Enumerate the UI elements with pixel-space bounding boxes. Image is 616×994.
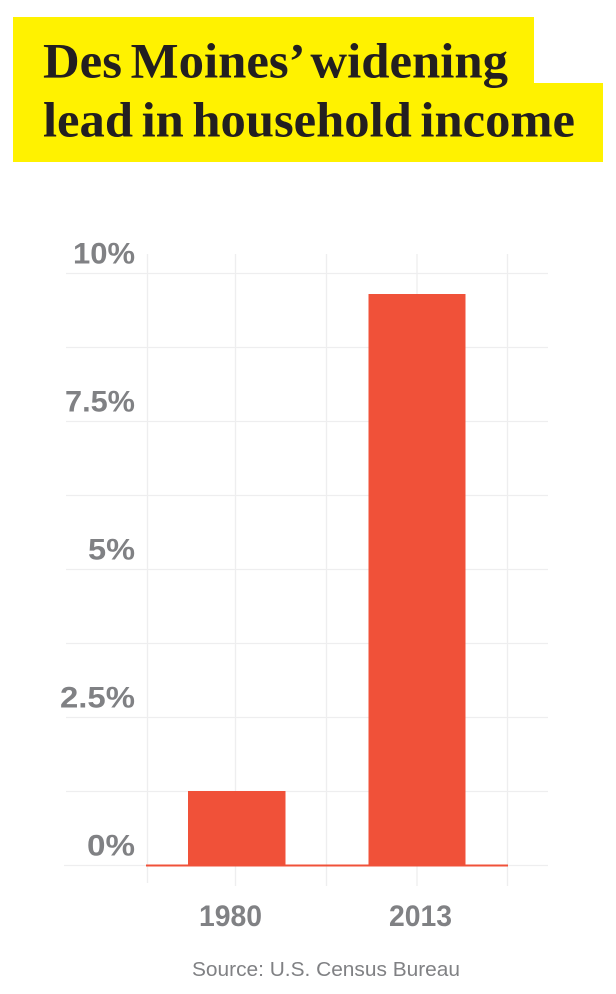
bar: 1980 (188, 791, 286, 866)
title line 1: Des Moines’ widening (43, 32, 508, 88)
x axis labels: 2013 (389, 900, 452, 933)
y axis labels: 5% (88, 534, 135, 566)
title line 2: lead in household income (43, 92, 575, 148)
bar: 2013 (368, 294, 466, 866)
y axis labels: 0% (87, 830, 135, 862)
baseline (146, 864, 508, 866)
y axis labels: 7.5% (65, 386, 135, 418)
source note: Source: U.S. Census Bureau (192, 959, 460, 981)
bar chart (60, 238, 548, 933)
x axis labels: 1980 (199, 900, 262, 933)
y axis labels (60, 238, 135, 862)
x axis labels (199, 900, 452, 933)
y axis labels: 10% (73, 238, 135, 270)
title (13, 17, 603, 162)
title highlight (13, 17, 603, 162)
y axis labels: 2.5% (60, 682, 135, 714)
